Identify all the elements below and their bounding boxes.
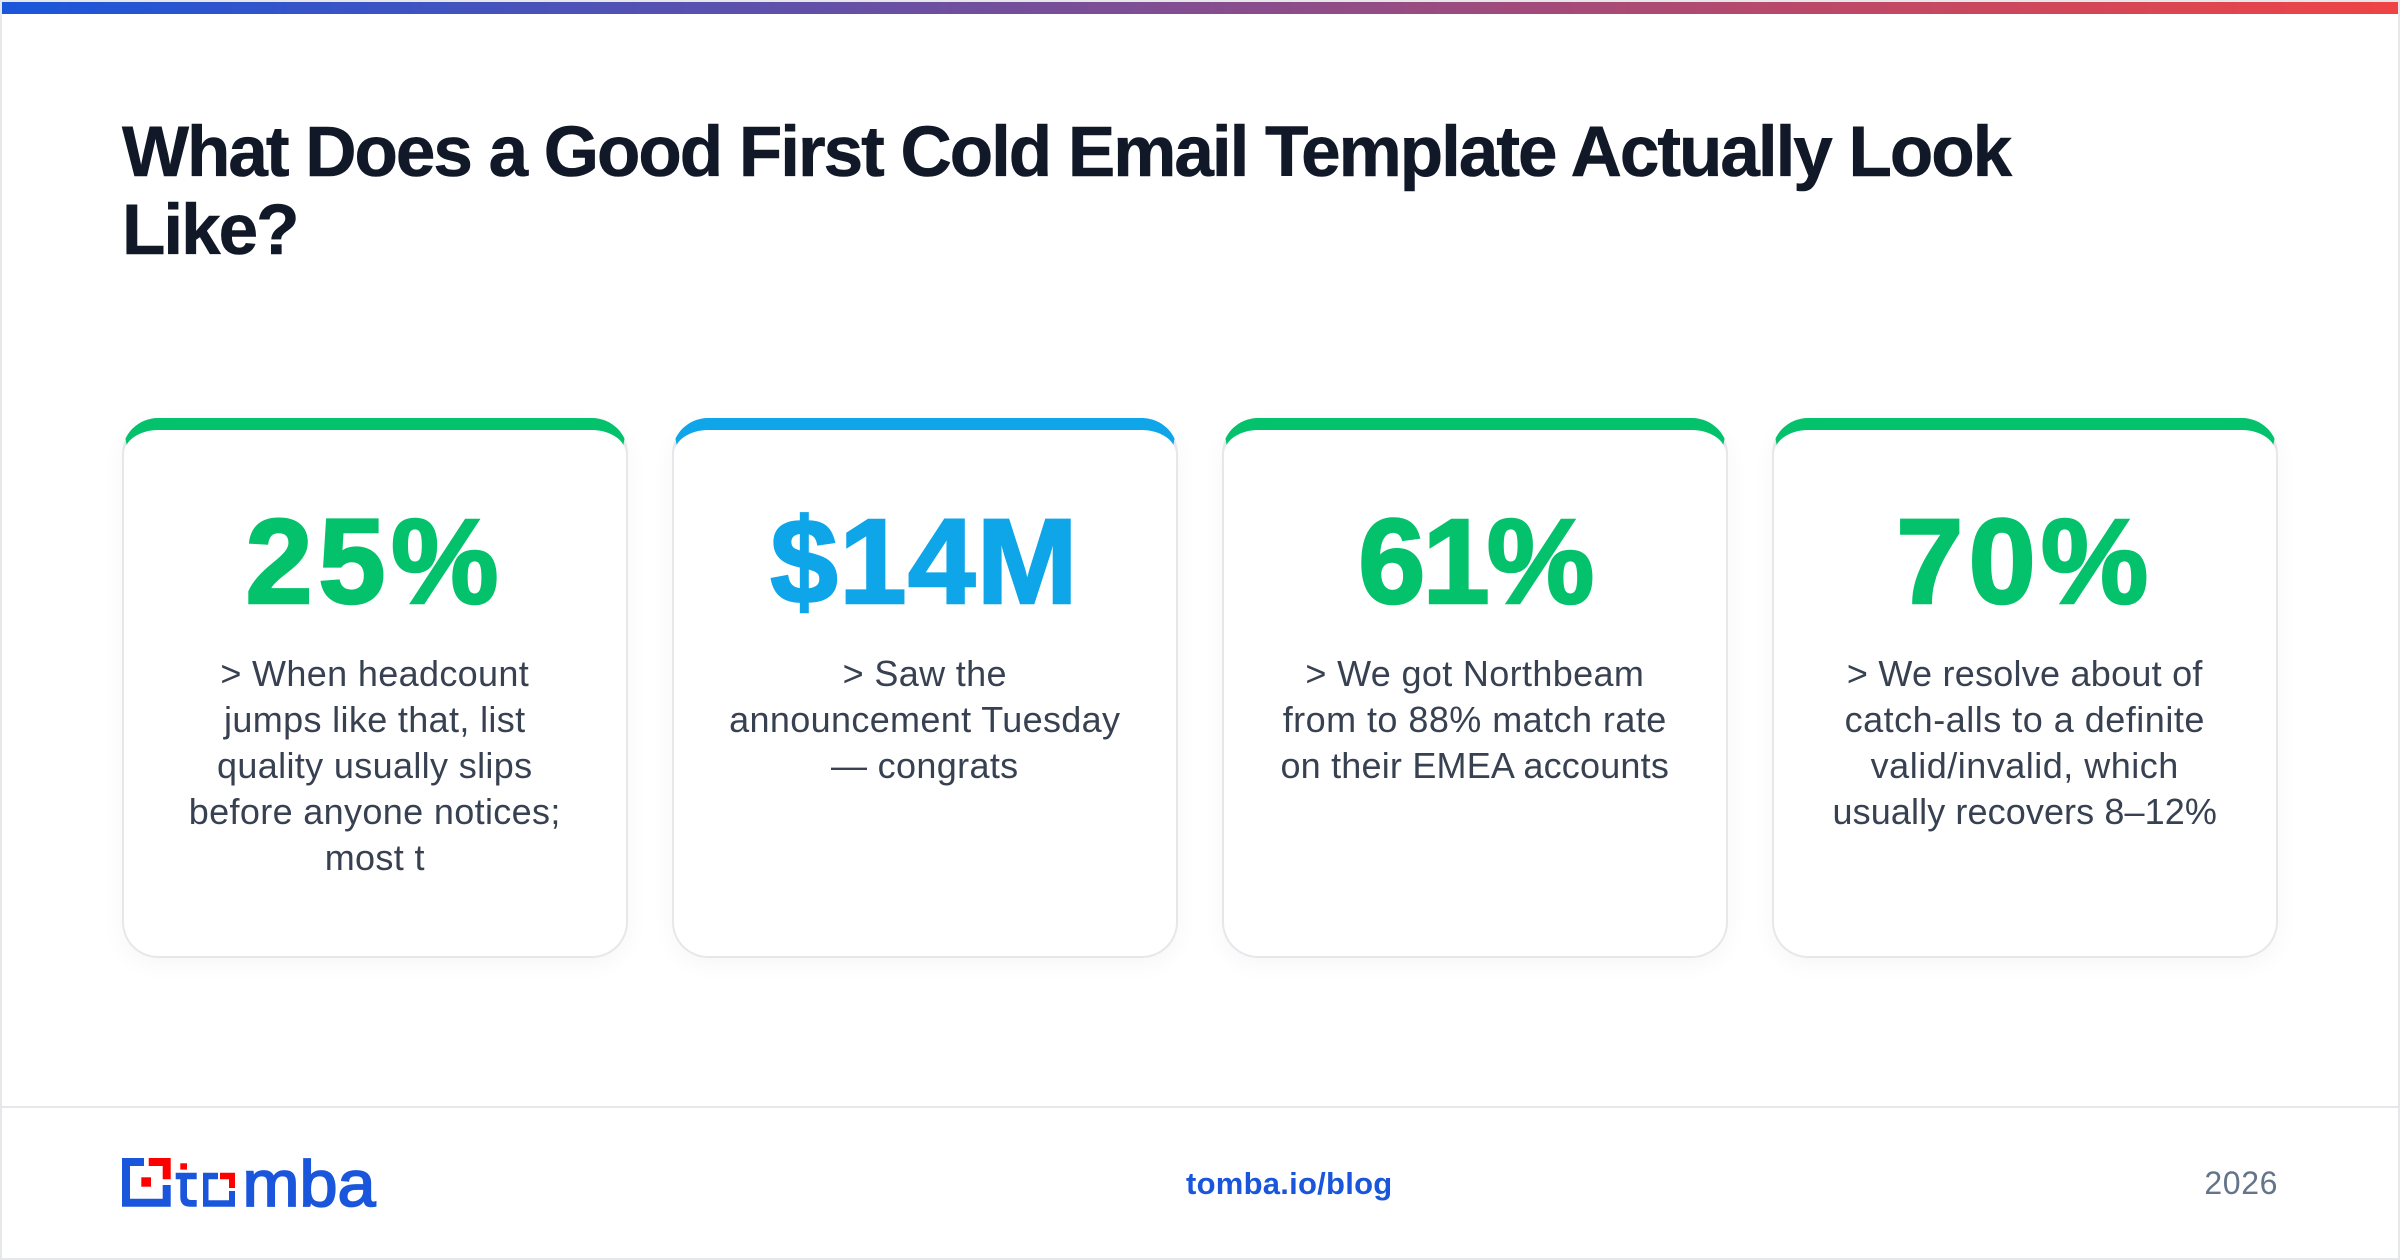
title: What Does a Good First Cold Email Template Actually Look [122, 113, 2010, 192]
stat description: before anyone notices; [189, 791, 561, 832]
stat description: > We resolve about of [1847, 653, 2203, 694]
stat value: 70% [1896, 493, 2153, 629]
title [122, 113, 2013, 270]
stat value: 25% [245, 493, 504, 629]
panel: stat 25% [122, 418, 628, 958]
stat description: most t [325, 837, 425, 878]
stat description: > When headcount [220, 653, 529, 694]
stat description: from to 88% match rate [1283, 699, 1667, 740]
panel: stat 70% [1772, 418, 2278, 958]
stat description: > We got Northbeam [1305, 653, 1644, 694]
footer year: 2026 [2204, 1165, 2278, 1201]
stat description [729, 653, 1120, 786]
title: Like? [122, 191, 297, 270]
stat description: on their EMEA accounts [1280, 745, 1669, 786]
stat description: > Saw the [843, 653, 1007, 694]
stat description: valid/invalid, which [1871, 745, 2179, 786]
stat description: announcement Tuesday [729, 699, 1120, 740]
stat description: jumps like that, list [224, 699, 525, 740]
stat value: $14M [770, 493, 1079, 629]
stat description: catch-alls to a definite [1845, 699, 2205, 740]
stat description: quality usually slips [217, 745, 532, 786]
footer link: tomba.io/blog [1186, 1166, 1392, 1201]
stat description [1833, 653, 2217, 832]
logo: tomba [122, 1150, 376, 1210]
panel: stat $14M [672, 418, 1178, 958]
stat description: — congrats [831, 745, 1019, 786]
panel: stat 61% [1222, 418, 1728, 958]
stat value: 61% [1358, 493, 1591, 629]
stat description [1280, 653, 1669, 786]
stat description [189, 653, 561, 878]
top gradient bar [0, 0, 2400, 14]
stat description: usually recovers 8–12% [1833, 791, 2217, 832]
